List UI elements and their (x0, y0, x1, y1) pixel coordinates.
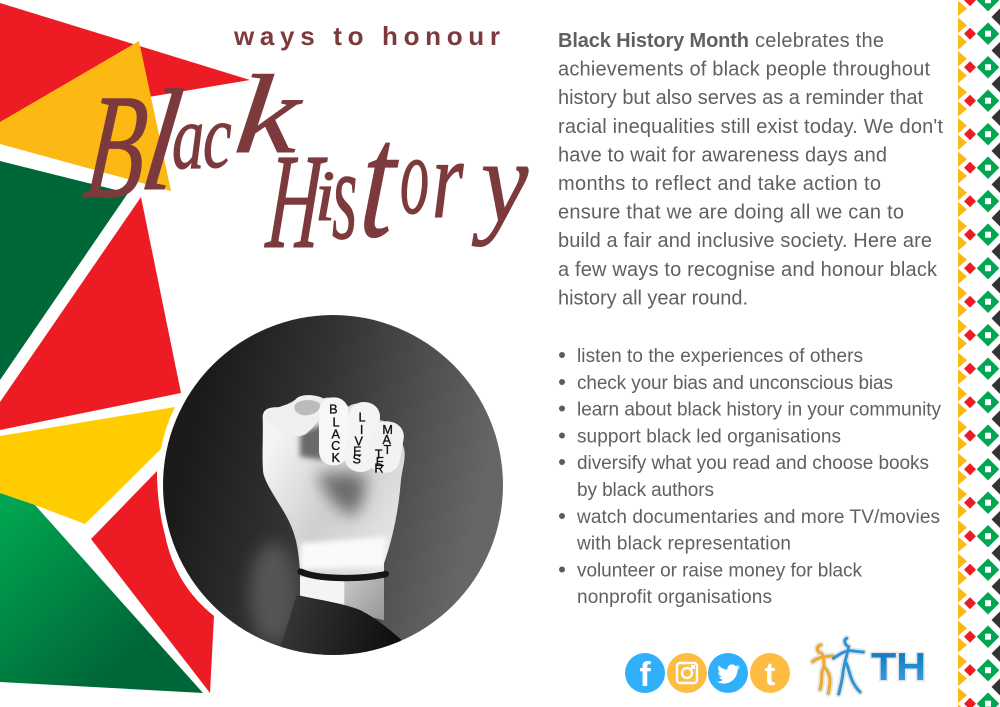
finger text: BLACK LIVES MATTER: M (382, 423, 393, 437)
finger text: BLACK LIVES MATTER: I (360, 423, 363, 437)
finger text: BLACK LIVES MATTER: E (353, 444, 362, 458)
title word: Black: B (79, 64, 155, 230)
bullet list: learn about black history in your community (577, 400, 942, 421)
icon: tumblr: t (765, 656, 776, 692)
finger text: BLACK LIVES MATTER: A (331, 428, 340, 442)
title word: Black (79, 53, 308, 230)
title word: History: i (315, 156, 335, 236)
heading: ways to honour: ways to honour (233, 21, 500, 51)
finger text: BLACK LIVES MATTER: V (354, 434, 363, 448)
finger text: BLACK LIVES MATTER: C (331, 439, 340, 453)
finger text: BLACK LIVES MATTER (329, 402, 393, 476)
title word: Black: a (172, 87, 204, 189)
intro paragraph: history but also serves as a reminder that (558, 87, 923, 109)
sleeve (280, 595, 402, 658)
title word: Black: l (133, 60, 190, 221)
logo: TH (813, 638, 926, 694)
social icons (625, 653, 790, 694)
intro paragraph: ensure that we are doing all we can to (558, 202, 904, 224)
shape: yellow polygon (0, 407, 175, 524)
shape: green gradient polygon (0, 493, 203, 693)
title word: History: o (400, 114, 429, 238)
decorative border pattern (958, 0, 1000, 707)
shape: lower red polygon (91, 471, 214, 693)
intro paragraph: achievements of black people throughout (558, 59, 930, 81)
bullet list (559, 346, 942, 608)
bullet list: by black authors (577, 480, 714, 501)
finger text: BLACK LIVES MATTER: K (331, 451, 340, 465)
bullet list: nonprofit organisations (577, 587, 772, 608)
background light patch (250, 543, 297, 643)
title word: History: H (262, 125, 330, 277)
bracelet (301, 572, 386, 578)
bullet list: listen to the experiences of others (577, 346, 863, 367)
hand (262, 395, 405, 620)
title word: Black: k (230, 53, 308, 177)
photo: raised fist in circle (159, 311, 507, 659)
finger text: BLACK LIVES MATTER: L (358, 410, 366, 424)
intro paragraph: have to wait for awareness days and (558, 144, 887, 166)
bullet list: support black led organisations (577, 426, 841, 447)
shape: large red triangle (0, 197, 181, 430)
logo text: TH (871, 646, 926, 689)
intro paragraph: build a fair and inclusive society. Here are (558, 230, 932, 252)
icon: tumblr (750, 653, 790, 693)
finger text: BLACK LIVES MATTER: E (376, 455, 384, 469)
finger text: BLACK LIVES MATTER: S (352, 452, 361, 466)
bullet list: with black representation (576, 534, 791, 555)
title word: History (262, 90, 528, 277)
fingers (319, 397, 348, 465)
title word: History: y (472, 117, 528, 247)
shape: amber triangle (0, 41, 171, 191)
finger text: BLACK LIVES MATTER: T (383, 443, 391, 457)
icon: instagram (667, 653, 707, 693)
title: Black History (79, 53, 528, 277)
finger text: BLACK LIVES MATTER: L (332, 416, 340, 430)
icon: facebook (625, 653, 665, 694)
intro paragraph (558, 30, 943, 309)
bullet list: volunteer or raise money for black (577, 560, 862, 581)
finger text: BLACK LIVES MATTER: T (375, 448, 383, 462)
intro paragraph: celebrates the (755, 30, 884, 52)
shape: top red triangle (0, 3, 250, 122)
icon: facebook: f (639, 656, 651, 694)
bullet list: check your bias and unconscious bias (577, 373, 893, 394)
title word: History: t (355, 90, 404, 273)
title word: Black: c (203, 86, 232, 188)
intro paragraph: months to reflect and take action to (558, 173, 881, 195)
icon: twitter (708, 653, 748, 693)
intro paragraph: a few ways to recognise and honour black (558, 259, 938, 281)
shape: dark green triangle (0, 161, 128, 380)
finger text: BLACK LIVES MATTER: A (382, 433, 391, 447)
bullet list: watch documentaries and more TV/movies (576, 507, 940, 528)
title word: History: r (432, 118, 464, 242)
icon: dancing figures (813, 638, 863, 694)
intro paragraph: history all year round. (558, 287, 748, 309)
intro paragraph: racial inequalities still exist today. We don't (558, 116, 943, 138)
bullet list: diversify what you read and choose books (577, 453, 929, 474)
panel: left geometric shapes (0, 3, 250, 693)
title word: History: s (332, 123, 357, 267)
finger text: BLACK LIVES MATTER: R (374, 462, 384, 476)
finger text: BLACK LIVES MATTER: B (329, 402, 338, 416)
intro paragraph: Black History Month (558, 30, 749, 52)
thumb (278, 396, 318, 436)
